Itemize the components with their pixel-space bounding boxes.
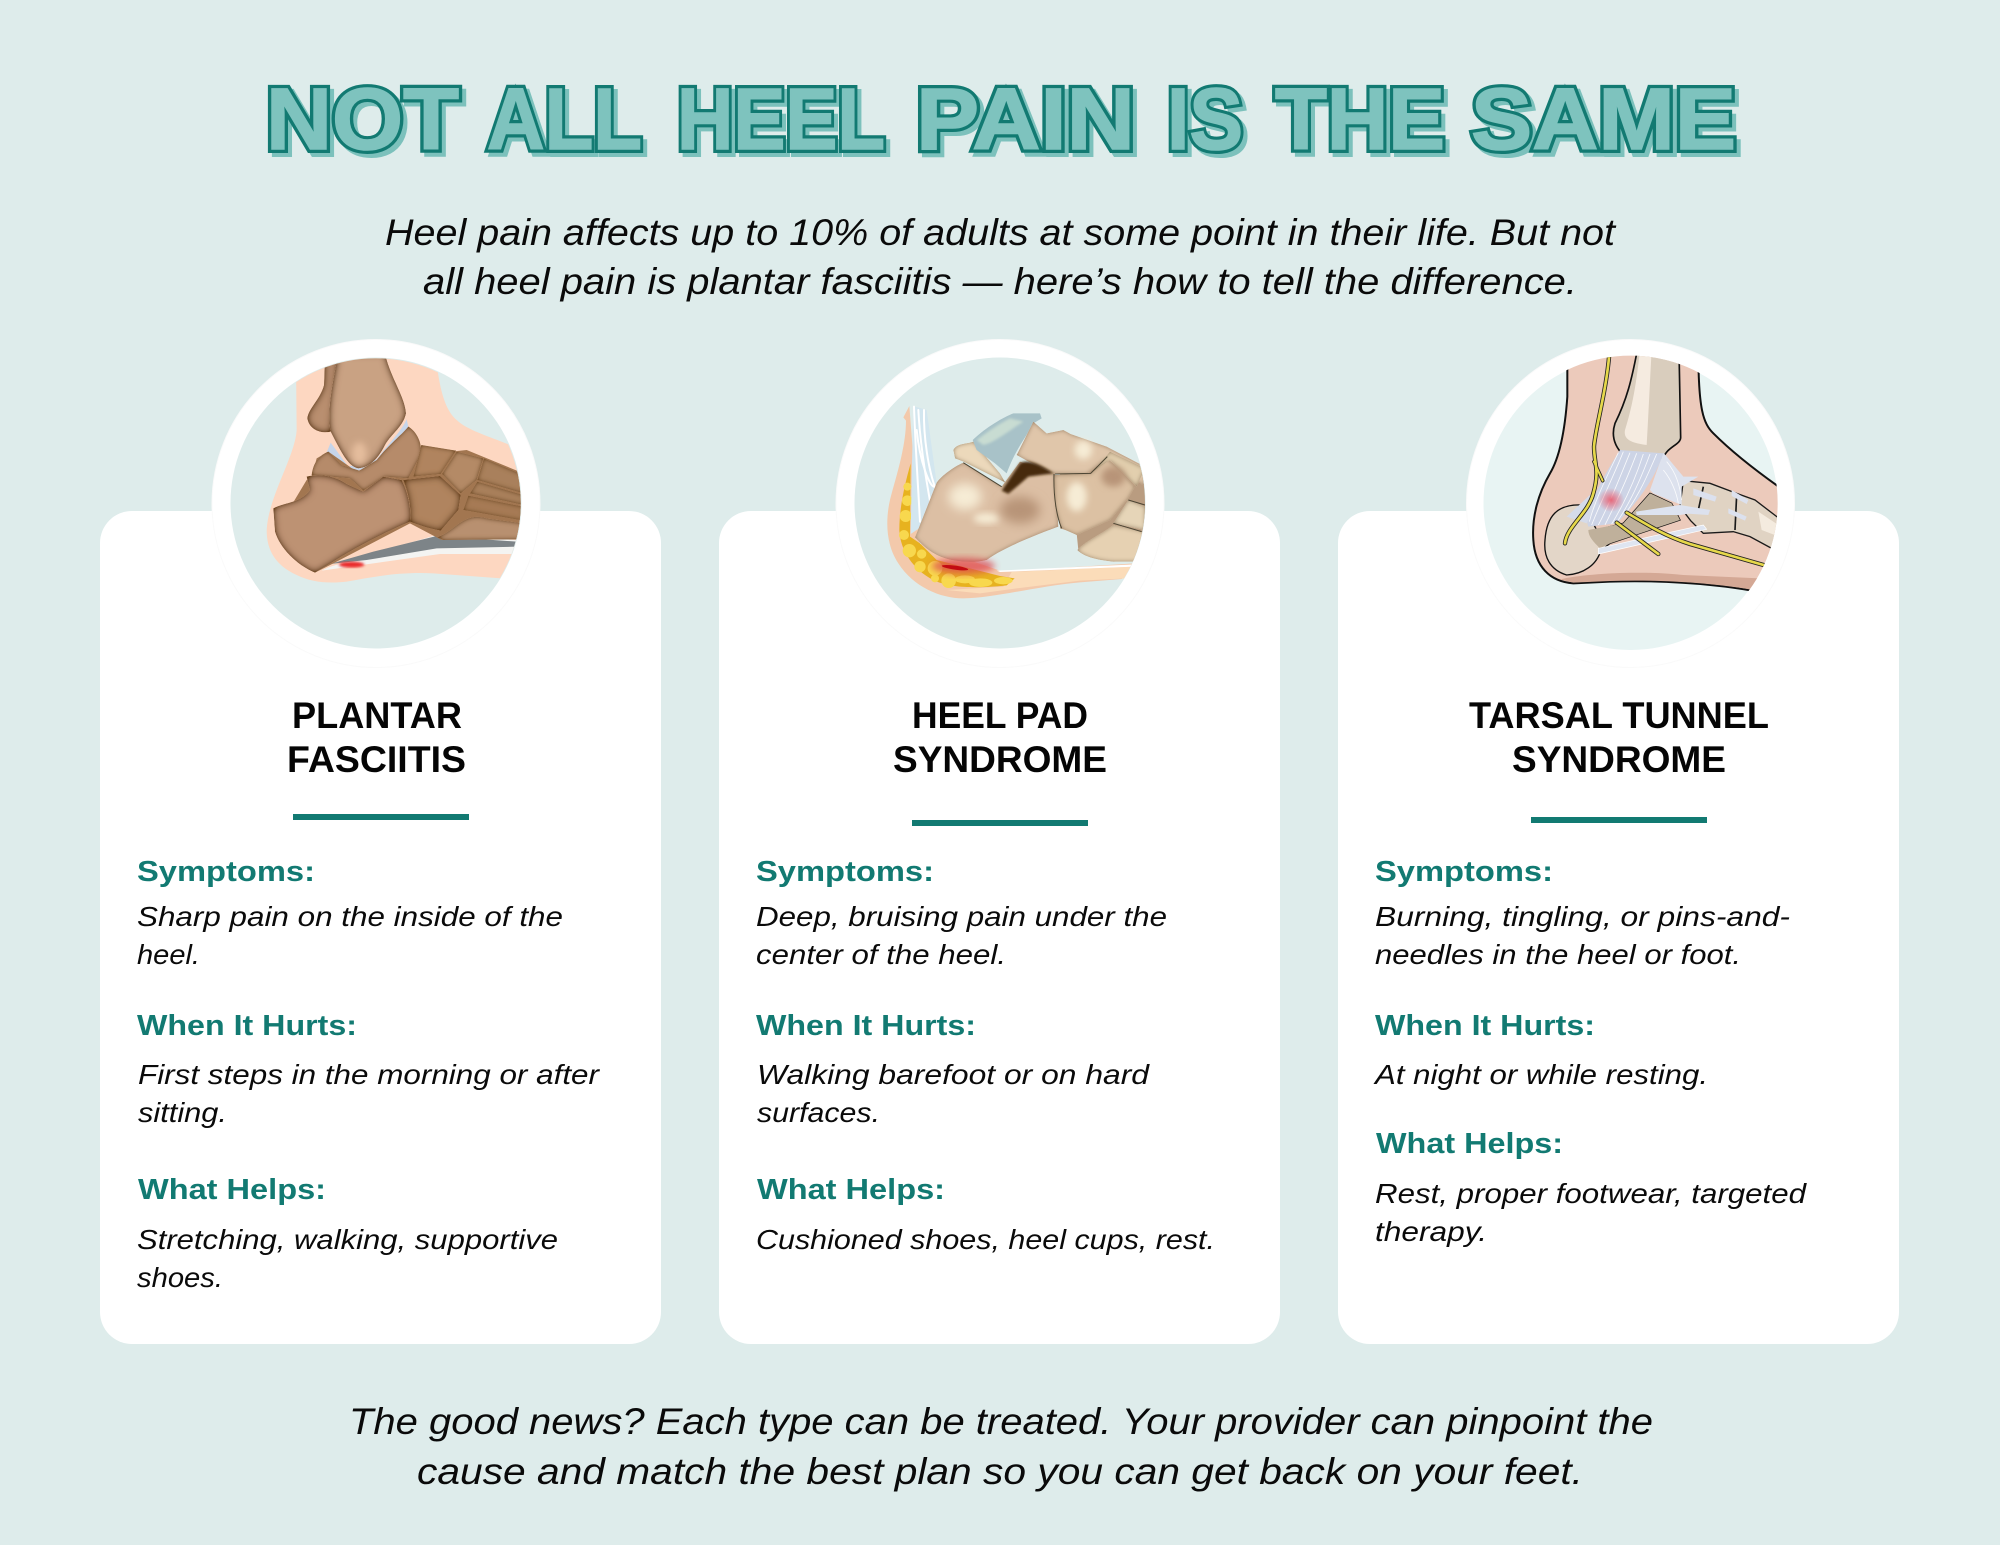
title: ALL bbox=[487, 71, 642, 168]
symptoms: heel. bbox=[137, 939, 200, 970]
title: SAME bbox=[1471, 71, 1736, 168]
title: PAIN bbox=[916, 71, 1135, 168]
when it hurts: First steps in the morning or after bbox=[138, 1059, 601, 1090]
when it hurts: surfaces. bbox=[757, 1097, 880, 1128]
panel: plantar fasciitis bbox=[100, 340, 661, 1344]
symptoms: Sharp pain on the inside of the bbox=[137, 901, 563, 932]
what helps bbox=[1375, 1128, 1808, 1247]
card background bbox=[100, 511, 661, 1344]
title: ALL bbox=[491, 75, 646, 172]
title: PAIN bbox=[916, 71, 1135, 168]
intro text bbox=[385, 212, 1617, 302]
when it hurts bbox=[137, 1010, 601, 1128]
when it hurts: When It Hurts: bbox=[756, 1010, 976, 1042]
icon: plantar fasciitis foot illustration bbox=[212, 340, 540, 668]
what helps: What Helps: bbox=[1376, 1128, 1563, 1160]
closing text: The good news? Each type can be treated. Your provider can pinpoint the bbox=[349, 1401, 1653, 1442]
heading underline bbox=[912, 820, 1088, 826]
symptoms: needles in the heel or foot. bbox=[1375, 939, 1741, 970]
icon: heel pad foot illustration bbox=[836, 340, 1164, 668]
title: NOT bbox=[266, 71, 459, 168]
heading: tarsal tunnel syndrome: TARSAL TUNNEL bbox=[1469, 695, 1769, 736]
title: SAME bbox=[1475, 75, 1740, 172]
intro text: Heel pain affects up to 10% of adults at some point in their life. But not bbox=[385, 212, 1617, 253]
what helps: Cushioned shoes, heel cups, rest. bbox=[756, 1224, 1215, 1255]
panel: heel pad syndrome bbox=[719, 340, 1280, 1344]
symptoms: Deep, bruising pain under the bbox=[756, 901, 1167, 932]
when it hurts: sitting. bbox=[138, 1097, 227, 1128]
heading: plantar fasciitis: FASCIITIS bbox=[287, 739, 466, 780]
icon: tarsal tunnel foot illustration bbox=[1466, 340, 1794, 668]
heading: heel pad syndrome: HEEL PAD bbox=[912, 695, 1088, 736]
title: THE bbox=[1275, 71, 1445, 168]
card background bbox=[719, 511, 1280, 1344]
heading: tarsal tunnel syndrome: SYNDROME bbox=[1512, 739, 1726, 780]
title: HEEL bbox=[677, 71, 885, 168]
title: IS bbox=[1167, 71, 1243, 168]
symptoms: center of the heel. bbox=[756, 939, 1006, 970]
title: IS bbox=[1171, 75, 1247, 172]
heading: plantar fasciitis bbox=[287, 695, 466, 780]
symptoms: Symptoms: bbox=[1375, 856, 1553, 888]
what helps bbox=[137, 1174, 558, 1293]
heading: heel pad syndrome bbox=[893, 695, 1107, 780]
symptoms: Burning, tingling, or pins-and- bbox=[1375, 901, 1790, 932]
intro text: all heel pain is plantar fasciitis — here’s how to tell the difference. bbox=[423, 261, 1577, 302]
panel: tarsal tunnel syndrome bbox=[1338, 340, 1899, 1344]
card background bbox=[1338, 511, 1899, 1344]
title: THE bbox=[1279, 75, 1449, 172]
when it hurts: Walking barefoot or on hard bbox=[757, 1059, 1151, 1090]
heading: tarsal tunnel syndrome bbox=[1469, 695, 1769, 780]
title: ALL bbox=[487, 71, 642, 168]
symptoms: Symptoms: bbox=[756, 856, 934, 888]
when it hurts: When It Hurts: bbox=[1375, 1010, 1595, 1042]
title: SAME bbox=[1471, 71, 1736, 168]
title: THE bbox=[1275, 71, 1445, 168]
title: NOT bbox=[266, 71, 459, 168]
title bbox=[266, 71, 1740, 172]
title: HEEL bbox=[681, 75, 889, 172]
what helps bbox=[756, 1174, 1215, 1255]
title: HEEL bbox=[677, 71, 885, 168]
heading: heel pad syndrome: SYNDROME bbox=[893, 739, 1107, 780]
heading: plantar fasciitis: PLANTAR bbox=[292, 695, 462, 736]
heading underline bbox=[1531, 817, 1707, 823]
symptoms: Symptoms: bbox=[137, 856, 315, 888]
when it hurts bbox=[1373, 1010, 1708, 1090]
when it hurts: At night or while resting. bbox=[1373, 1059, 1708, 1090]
symptoms bbox=[756, 856, 1167, 970]
what helps: Stretching, walking, supportive bbox=[137, 1224, 558, 1255]
what helps: Rest, proper footwear, targeted bbox=[1375, 1178, 1808, 1209]
what helps: therapy. bbox=[1375, 1216, 1487, 1247]
closing text bbox=[349, 1401, 1653, 1492]
title: IS bbox=[1167, 71, 1243, 168]
what helps: What Helps: bbox=[138, 1174, 326, 1206]
what helps: shoes. bbox=[137, 1262, 223, 1293]
closing text: cause and match the best plan so you can get back on your feet. bbox=[417, 1451, 1583, 1492]
symptoms bbox=[1375, 856, 1790, 970]
title: NOT bbox=[270, 75, 463, 172]
when it hurts bbox=[756, 1010, 1151, 1128]
what helps: What Helps: bbox=[757, 1174, 945, 1206]
when it hurts: When It Hurts: bbox=[137, 1010, 357, 1042]
title: PAIN bbox=[920, 75, 1139, 172]
symptoms bbox=[137, 856, 563, 970]
heading underline bbox=[293, 814, 469, 820]
